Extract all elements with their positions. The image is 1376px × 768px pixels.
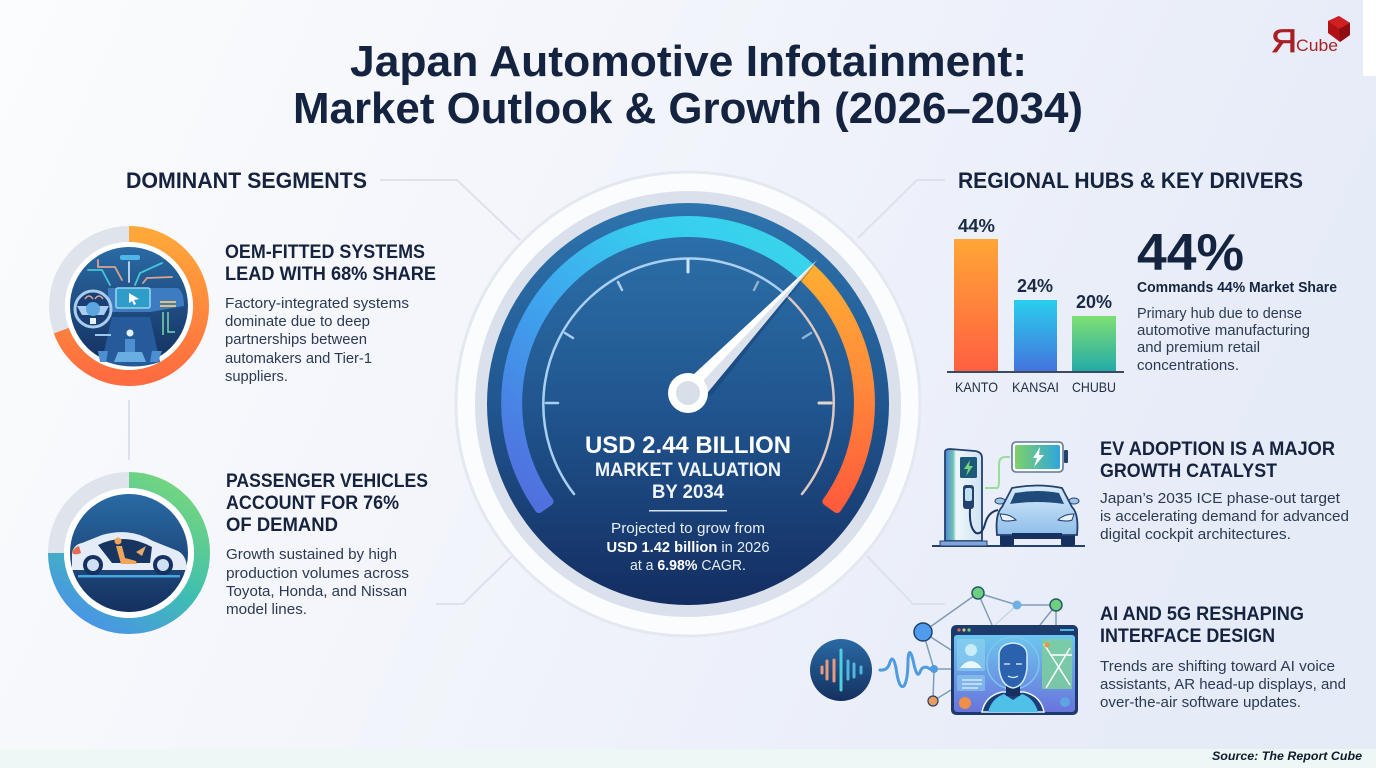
logo: RCube <box>1271 16 1350 59</box>
gauge value text: USD 2.44 BILLION <box>585 432 791 459</box>
gauge value text <box>585 432 791 512</box>
heading: regional hubs: REGIONAL HUBS & KEY DRIVERS <box>958 168 1303 193</box>
heading <box>1100 604 1304 647</box>
gauge arc: orange to red <box>807 272 864 515</box>
gauge <box>456 172 920 636</box>
icon: dashboard donut <box>57 234 201 378</box>
icon: car donut <box>56 480 202 626</box>
callout: 44% market share: concentrations. <box>1137 358 1239 374</box>
body text: digital cockpit architectures. <box>1100 527 1291 543</box>
body text: suppliers. <box>225 369 288 385</box>
body text <box>1100 491 1349 543</box>
body text <box>1100 659 1346 711</box>
bar chart: regional share: CHUBU <box>1072 379 1116 395</box>
panel: passenger vehicles <box>56 471 428 626</box>
callout: 44% market share: 44% <box>1137 224 1244 282</box>
source note: Source: The Report Cube <box>1212 749 1362 763</box>
panel: OEM-fitted systems <box>57 234 436 385</box>
icon: voice waveform <box>810 639 930 701</box>
gauge value text: BY 2034 <box>652 482 724 503</box>
footer strip <box>0 749 1376 768</box>
heading: ACCOUNT FOR 76% <box>226 493 399 514</box>
gauge value text: MARKET VALUATION <box>595 460 781 481</box>
heading: INTERFACE DESIGN <box>1100 626 1275 647</box>
needle <box>668 260 817 413</box>
body text: assistants, AR head-up displays, and <box>1100 677 1346 693</box>
body text: is accelerating demand for advanced <box>1100 509 1349 525</box>
heading: LEAD WITH 68% SHARE <box>225 264 436 285</box>
callout: 44% market share: and premium retail <box>1137 340 1260 356</box>
heading: EV ADOPTION IS A MAJOR <box>1100 439 1335 460</box>
logo: RCube: Я <box>1271 23 1297 59</box>
gauge arc: blue to cyan <box>512 227 807 515</box>
panel: AI and 5G <box>810 587 1346 715</box>
body text <box>226 547 409 618</box>
heading <box>225 242 436 285</box>
title: Japan Automotive Infotainment: <box>350 37 1027 86</box>
heading: OEM-FITTED SYSTEMS <box>225 242 425 263</box>
bar chart: regional share: 20% <box>1076 292 1112 312</box>
heading: GROWTH CATALYST <box>1100 461 1277 482</box>
body text: Trends are shifting toward AI voice <box>1100 659 1335 675</box>
body text: production volumes across <box>226 566 409 582</box>
body text: partnerships between <box>225 332 367 348</box>
body text: automakers and Tier-1 <box>225 351 372 367</box>
gauge projection text: USD 1.42 billion in 2026 <box>606 539 770 556</box>
callout: 44% market share: Commands 44% Market Share <box>1137 280 1337 296</box>
heading <box>1100 439 1335 482</box>
title: Market Outlook & Growth (2026–2034) <box>293 84 1083 133</box>
heading: PASSENGER VEHICLES <box>226 471 428 492</box>
logo backing patch <box>1363 0 1376 76</box>
scale arc and ticks <box>543 258 834 494</box>
AI assistant screen <box>951 625 1078 715</box>
network diagram <box>914 587 1062 706</box>
body text: Japan’s 2035 ICE phase-out target <box>1100 491 1340 507</box>
bar chart: regional share: KANSAI <box>1012 379 1059 395</box>
body text: Toyota, Honda, and Nissan <box>226 584 407 600</box>
body text: over-the-air software updates. <box>1100 695 1301 711</box>
body text: Factory-integrated systems <box>225 296 409 312</box>
body text <box>225 296 409 385</box>
panel: EV adoption <box>932 439 1349 547</box>
bar chart: regional share: KANTO <box>955 379 998 395</box>
gauge projection text <box>606 520 770 574</box>
heading: dominant segments: DOMINANT SEGMENTS <box>126 168 367 193</box>
callout: 44% market share <box>1137 224 1337 374</box>
heading: OF DEMAND <box>226 515 338 536</box>
logo: RCube: Cube <box>1296 36 1338 55</box>
body text: model lines. <box>226 602 307 618</box>
body text: Growth sustained by high <box>226 547 397 563</box>
body text: dominate due to deep <box>225 314 370 330</box>
bar chart: regional share <box>947 216 1124 395</box>
bar chart: regional share: 44% <box>958 216 995 236</box>
gauge rings <box>456 172 920 636</box>
gauge dial <box>487 203 889 605</box>
connector lines <box>129 180 945 604</box>
title <box>293 37 1083 133</box>
gauge projection text: Projected to grow from <box>611 520 765 537</box>
heading: AI AND 5G RESHAPING <box>1100 604 1304 625</box>
gauge projection text: at a 6.98% CAGR. <box>630 557 746 574</box>
heading <box>226 471 428 536</box>
bar chart: regional share: 24% <box>1017 276 1053 296</box>
callout: 44% market share: automotive manufacturing <box>1137 323 1310 339</box>
callout: 44% market share: Primary hub due to dense <box>1137 306 1302 322</box>
icon: EV charger and car <box>932 442 1085 547</box>
